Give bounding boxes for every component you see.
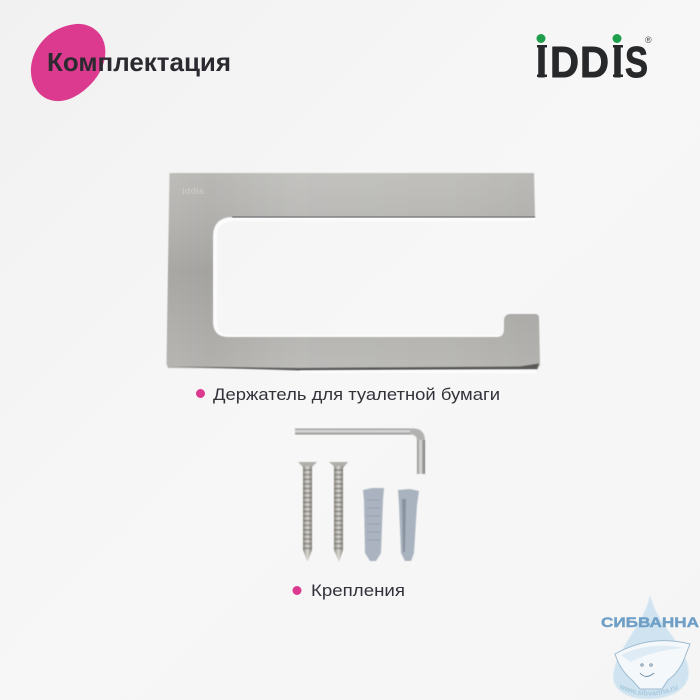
watermark: Сибванна bbox=[601, 596, 699, 700]
hardware: fasteners bbox=[295, 428, 425, 562]
logo: IDDIS bbox=[536, 34, 652, 87]
logo wordmark bbox=[536, 38, 648, 87]
screw 1 bbox=[298, 462, 317, 562]
watermark bath bbox=[615, 641, 690, 689]
logo wordmark: I bbox=[612, 38, 623, 87]
logo dots bbox=[536, 34, 622, 43]
wall plug 1 bbox=[363, 488, 384, 561]
logo wordmark: D bbox=[580, 38, 609, 87]
logo wordmark: D bbox=[550, 38, 579, 87]
label text: Держатель для туалетной бумаги bbox=[213, 385, 500, 404]
watermark name: СИБВАННА bbox=[601, 614, 699, 630]
engraved brand on holder: Iddis bbox=[182, 186, 204, 197]
screw 2 bbox=[329, 462, 348, 562]
logo serifs bbox=[537, 45, 623, 77]
icon: pink blob bbox=[31, 24, 105, 101]
wall plug 2 bbox=[398, 489, 419, 561]
inner chrome edge bbox=[213, 217, 535, 338]
logo wordmark: S bbox=[625, 38, 648, 87]
bullet bbox=[196, 389, 205, 398]
watermark drop bbox=[613, 595, 689, 699]
bottom chrome strip bbox=[300, 370, 537, 373]
bottom shadow edge bbox=[168, 364, 539, 370]
body sheen bbox=[166, 173, 540, 370]
bullet bbox=[292, 586, 302, 595]
label: holder bbox=[196, 385, 500, 404]
watermark tub interior bbox=[621, 646, 684, 662]
top arm lower shadow bbox=[232, 216, 535, 218]
heading text: Комплектация bbox=[47, 47, 231, 77]
watermark url: www.sibvanna.ru bbox=[620, 684, 678, 696]
watermark face bbox=[640, 664, 654, 676]
logo registered mark: ® bbox=[645, 35, 652, 45]
allen key bbox=[295, 428, 425, 474]
label: fasteners bbox=[292, 581, 405, 600]
product: paper holder bbox=[166, 173, 540, 373]
heading: Комплектация with pink blob bbox=[31, 24, 231, 101]
label text: Крепления bbox=[311, 581, 405, 600]
logo wordmark: I bbox=[536, 38, 547, 87]
holder body bbox=[166, 173, 540, 370]
